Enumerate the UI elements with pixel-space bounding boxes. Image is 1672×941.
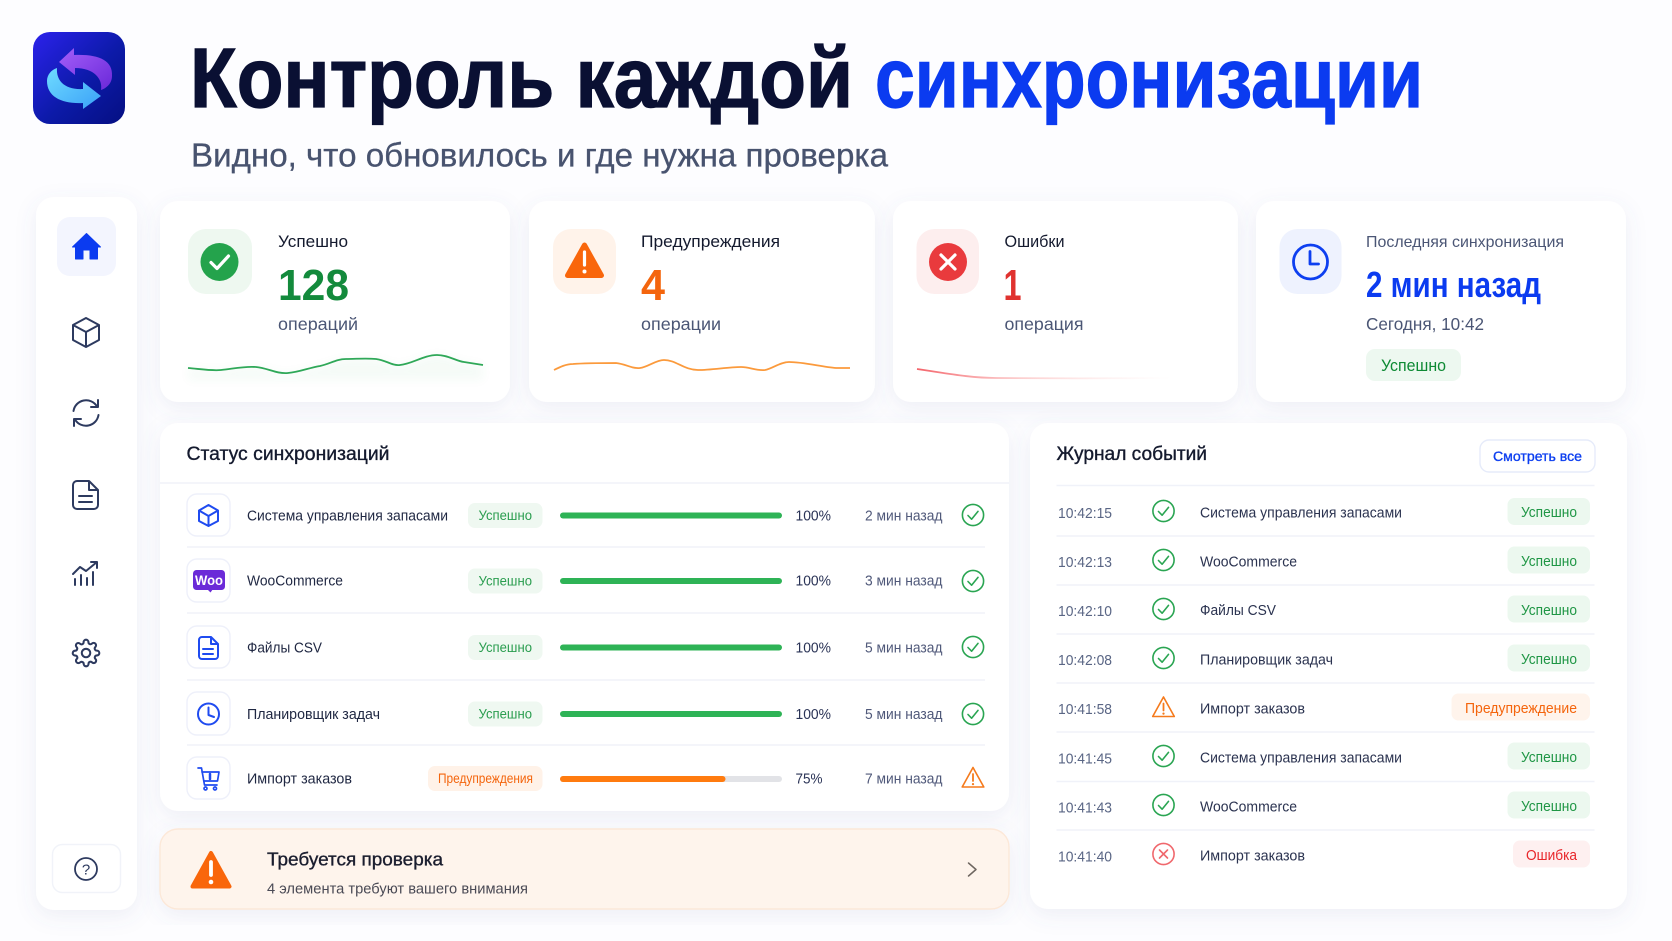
row: task scheduler: Планировщик задач — [247, 707, 380, 723]
row: CSV files: 100% — [796, 640, 831, 656]
title — [190, 31, 1423, 125]
row: WooCommerce: Успешно — [478, 572, 532, 588]
row: WooCommerce — [187, 559, 984, 602]
panel: success stat card: Успешно — [278, 232, 348, 251]
log row 8: error: 10:41:40 — [1058, 848, 1112, 866]
row: order import: Импорт заказов — [247, 772, 352, 788]
sparkline: errors — [917, 369, 1172, 378]
panel: success stat card: 128 — [278, 261, 349, 310]
row: order import: 7 мин назад — [865, 772, 943, 788]
panel: errors stat card: Ошибки — [1004, 232, 1064, 251]
icon: error x — [916, 229, 979, 294]
log row 8: error: Ошибка — [1526, 847, 1578, 864]
sparkline: warnings — [554, 360, 850, 370]
subtitle: Видно, что обновилось и где нужна проверка — [191, 136, 889, 174]
panel: sync status table — [160, 423, 1009, 811]
log row 8: error: Импорт заказов — [1200, 848, 1305, 864]
title: синхронизации — [875, 31, 1423, 125]
row: inventory system: 2 мин назад — [865, 508, 943, 524]
panel: errors stat card: 1 — [1004, 261, 1022, 310]
row: CSV files: 5 мин назад — [865, 640, 943, 656]
heading: sync status: Статус синхронизаций — [186, 444, 390, 465]
icon: document — [73, 481, 98, 509]
log row 3: Успешно — [1521, 602, 1577, 619]
log row 4 — [1058, 644, 1590, 672]
icon: success check — [188, 229, 252, 294]
log row 1: 10:42:15 — [1058, 505, 1112, 522]
row: CSV files — [187, 626, 984, 668]
icon: cart — [198, 768, 219, 790]
log row 3 — [1058, 596, 1590, 622]
log row 5: warning: 10:41:58 — [1058, 701, 1112, 718]
log row 7 — [1058, 792, 1590, 818]
log row 4: 10:42:08 — [1058, 652, 1112, 669]
icon: help button: ? — [82, 862, 90, 878]
callout: review required: 4 элемента требуют вашего внимания — [267, 882, 528, 898]
row: CSV files: Файлы CSV — [247, 640, 322, 656]
sparkline: success — [188, 355, 483, 380]
panel: warnings stat card: Предупреждения — [641, 232, 780, 251]
row: inventory system: 100% — [796, 508, 831, 524]
panel: last sync card — [1256, 201, 1626, 402]
row: order import: 75% — [796, 772, 823, 788]
panel: success stat card: операций — [278, 314, 358, 334]
row: task scheduler: Успешно — [478, 706, 532, 722]
row: inventory system — [187, 494, 984, 536]
log row 6: Успешно — [1521, 749, 1577, 766]
log row 2 — [1058, 546, 1590, 574]
icon: chart — [73, 562, 97, 585]
log row 4: Планировщик задач — [1200, 652, 1333, 668]
log row 7: Успешно — [1521, 798, 1577, 815]
icon: settings gear — [73, 640, 99, 666]
icon: error circle — [1153, 843, 1174, 865]
log row 3: Файлы CSV — [1200, 603, 1276, 619]
row: order import — [187, 757, 984, 799]
panel: errors stat card: операция — [1004, 314, 1084, 334]
log row 2: 10:42:13 — [1058, 554, 1112, 571]
row: task scheduler: 5 мин назад — [865, 707, 943, 723]
log row 5: warning — [1058, 694, 1590, 720]
heading: event log: Журнал событий — [1056, 444, 1207, 465]
icon: clock — [1280, 229, 1342, 294]
row: WooCommerce: 100% — [796, 574, 831, 590]
icon: sync — [74, 400, 98, 426]
icon: help button — [52, 844, 120, 892]
button: view all: Смотреть все — [1493, 448, 1582, 464]
log row 1 — [1058, 498, 1590, 525]
row: order import: Предупреждения — [438, 770, 533, 786]
log row 3: 10:42:10 — [1058, 603, 1112, 620]
icon: Woo logo — [193, 570, 225, 592]
log row 2: Успешно — [1521, 553, 1577, 570]
log row 7: 10:41:43 — [1058, 800, 1112, 816]
icon: Woo logo: Woo — [195, 572, 223, 588]
log row 8: error — [1058, 840, 1590, 868]
panel: warnings stat card: операции — [641, 314, 721, 334]
row: inventory system: Успешно — [478, 507, 532, 523]
panel: last sync card: 2 мин назад — [1366, 264, 1541, 305]
log row 2: WooCommerce — [1200, 554, 1297, 570]
row: WooCommerce: 3 мин назад — [865, 574, 943, 590]
icon: chevron — [968, 863, 976, 876]
panel: event log — [1030, 423, 1627, 909]
callout: review required: Требуется проверка — [267, 848, 444, 870]
row: WooCommerce: WooCommerce — [247, 574, 343, 590]
log row 4: Успешно — [1521, 651, 1577, 668]
callout: review required — [160, 829, 1009, 909]
icon: warning — [192, 853, 230, 886]
title: Контроль каждой — [190, 31, 853, 125]
log row 1: Успешно — [1521, 504, 1577, 521]
log row 6: Система управления запасами — [1200, 750, 1402, 766]
row: CSV files: Успешно — [478, 639, 532, 655]
log row 6: 10:41:45 — [1058, 750, 1112, 768]
icon: warning triangle — [553, 229, 616, 294]
panel: warnings stat card: 4 — [641, 261, 666, 310]
button: view all — [1480, 440, 1595, 472]
panel: warnings stat card — [529, 201, 875, 402]
panel: last sync card: Сегодня, 10:42 — [1366, 314, 1484, 334]
logo icon: sync arrows — [33, 32, 125, 124]
log row 5: warning: Предупреждение — [1465, 700, 1577, 717]
panel: success stat card — [160, 201, 510, 402]
badge: success — [1366, 349, 1461, 381]
icon: home (active) — [57, 217, 116, 276]
panel: last sync card: Последняя синхронизация — [1366, 234, 1564, 251]
panel: errors stat card — [893, 201, 1238, 402]
log row 1: Система управления запасами — [1200, 506, 1402, 522]
row: inventory system: Система управления запасами — [247, 508, 448, 524]
row: task scheduler: 100% — [796, 707, 831, 723]
log row 7: WooCommerce — [1200, 800, 1297, 816]
icon: cube — [73, 318, 99, 347]
row: task scheduler — [187, 692, 984, 735]
log row 6 — [1058, 742, 1590, 770]
panel: sidebar navigation — [36, 197, 137, 910]
log row 5: warning: Импорт заказов — [1200, 702, 1305, 718]
badge: success: Успешно — [1381, 357, 1446, 375]
